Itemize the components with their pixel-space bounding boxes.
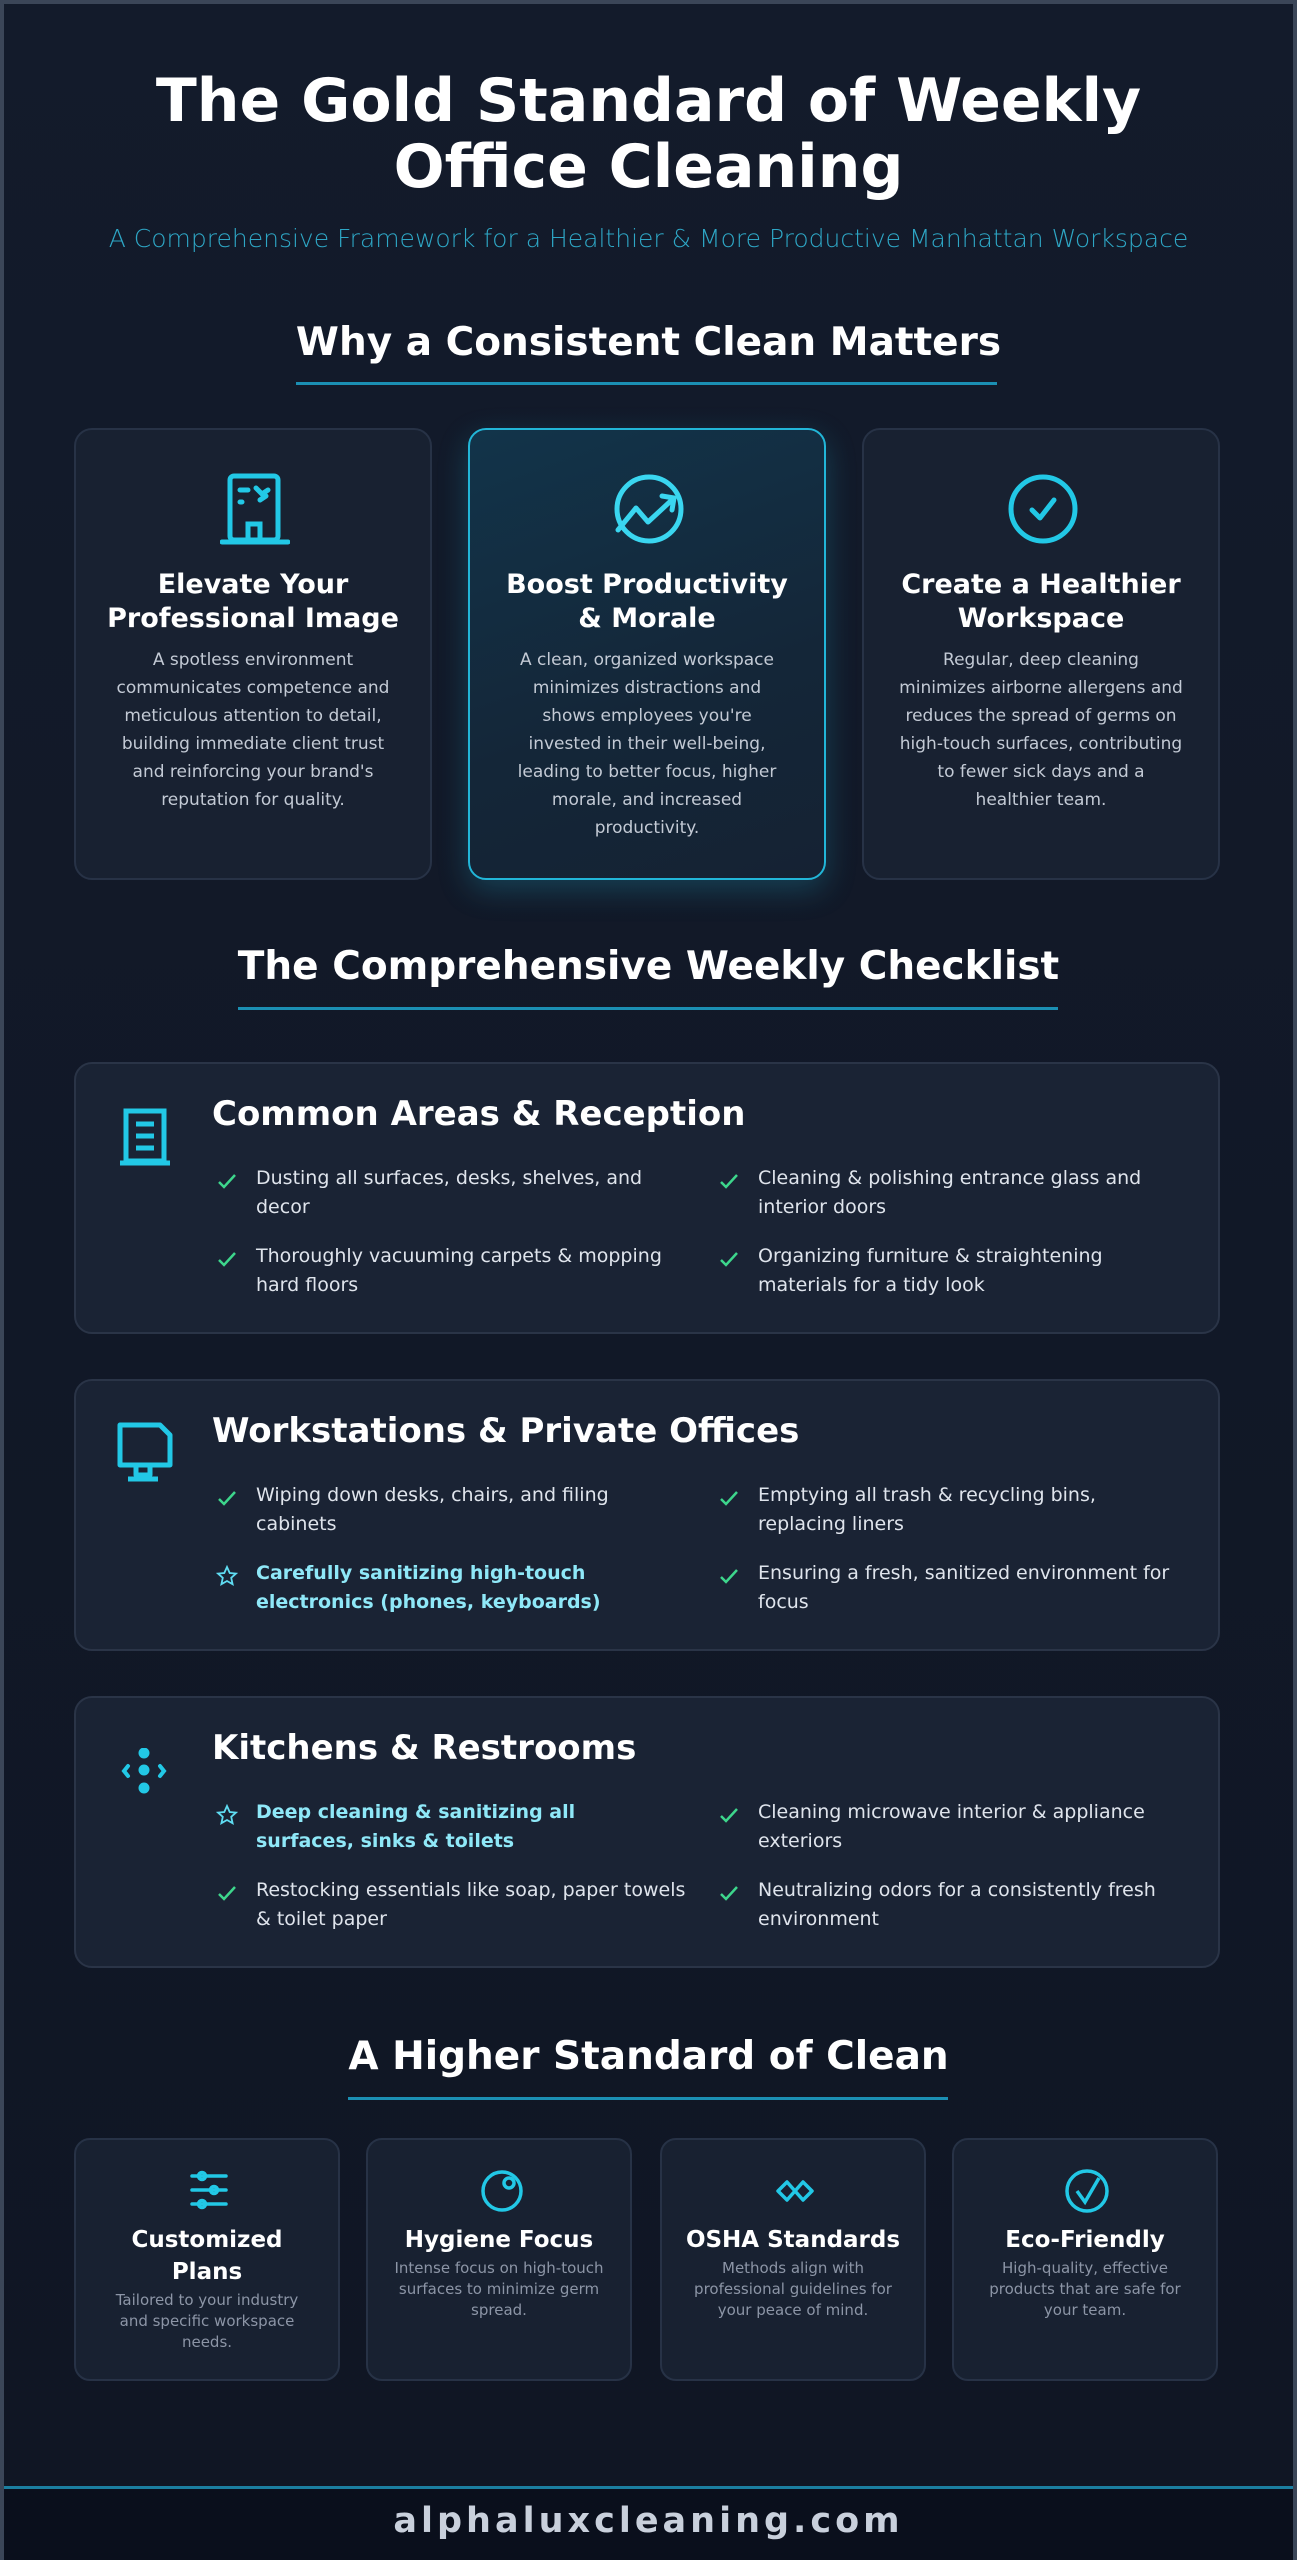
panel: kitchens: Restocking essentials like soap, paper towels & toilet paper (256, 1879, 685, 1930)
icon: infinity (776, 2180, 814, 2202)
card: healthier (862, 428, 1220, 880)
heading: checklist: The Comprehensive Weekly Checklist (238, 944, 1059, 989)
feature: customized plans (74, 2138, 340, 2381)
card: professional image (74, 428, 432, 880)
panel: workstations: Carefully sanitizing high-touch electronics (phones, keyboards) (256, 1562, 601, 1613)
icon: monitor (118, 1422, 172, 1482)
feature: customized plans: Customized (131, 2227, 283, 2253)
panel: kitchens: Cleaning microwave interior & appliance exteriors (758, 1801, 1145, 1852)
card: productivity: & Morale (578, 603, 716, 634)
icon: check circle (1065, 2169, 1109, 2213)
icon: building (220, 474, 290, 544)
feature: eco: Eco-Friendly (1005, 2227, 1165, 2253)
feature: hygiene: Intense focus on high-touch surfaces to minimize germ spread. (394, 2259, 604, 2319)
title: Office Cleaning (394, 132, 903, 202)
panel: common areas: Cleaning & polishing entrance glass and interior doors (758, 1167, 1141, 1218)
feature: hygiene: Hygiene Focus (405, 2227, 593, 2253)
panel: common areas (74, 1062, 1220, 1334)
subtitle: A Comprehensive Framework for a Healthier & More Productive Manhattan Workspace (109, 224, 1188, 253)
card: professional image: A spotless environment communicates competence and meticulous attention to detail, building immediate client trust and reinforcing your brand's reputation for quality. (117, 650, 389, 810)
card: productivity: A clean, organized workspace minimizes distractions and shows employees you're invested in their well-being, leading to better focus, higher morale, and increased productivity. (518, 650, 776, 838)
feature: customized plans: Plans (172, 2259, 242, 2285)
panel: workstations (74, 1379, 1220, 1651)
icon: check circle (1008, 474, 1078, 544)
icon: hygiene circle (481, 2170, 523, 2212)
heading: why: Why a Consistent Clean Matters (296, 320, 1001, 365)
card: healthier: Create a Healthier (901, 569, 1181, 600)
card: productivity (468, 428, 826, 880)
feature: osha (660, 2138, 926, 2381)
panel: kitchens: Neutralizing odors for a consistently fresh environment (758, 1879, 1156, 1930)
panel: common areas: Organizing furniture & straightening materials for a tidy look (758, 1245, 1103, 1296)
card: professional image: Professional Image (107, 603, 399, 634)
panel: common areas: Common Areas & Reception (212, 1094, 745, 1134)
icon: document (120, 1108, 170, 1166)
feature: osha: OSHA Standards (686, 2227, 900, 2253)
heading: higher standard: A Higher Standard of Clean (348, 2034, 949, 2079)
feature: eco: High-quality, effective products that are safe for your team. (989, 2259, 1181, 2319)
panel: workstations: Ensuring a fresh, sanitized environment for focus (758, 1562, 1169, 1613)
panel: kitchens: Deep cleaning & sanitizing all surfaces, sinks & toilets (256, 1801, 575, 1852)
card: productivity: Boost Productivity (506, 569, 788, 600)
panel: common areas: Dusting all surfaces, desks, shelves, and decor (256, 1167, 642, 1218)
panel: workstations: Wiping down desks, chairs, and filing cabinets (256, 1484, 609, 1535)
icon: sliders (190, 2170, 228, 2210)
card: healthier: Workspace (958, 603, 1124, 634)
feature: eco (952, 2138, 1218, 2381)
panel: workstations: Workstations & Private Offices (212, 1411, 799, 1451)
panel: kitchens: Kitchens & Restrooms (212, 1728, 636, 1768)
footer (4, 2486, 1293, 2560)
card: healthier: Regular, deep cleaning minimizes airborne allergens and reduces the spread of germs on high-touch surfaces, contributing to fewer sick days and a healthier team. (899, 650, 1183, 810)
feature: osha: Methods align with professional guidelines for your peace of mind. (694, 2259, 892, 2319)
feature: customized plans: Tailored to your industry and specific workspace needs. (116, 2291, 298, 2351)
panel: workstations: Emptying all trash & recycling bins, replacing liners (758, 1484, 1096, 1535)
panel: kitchens (74, 1696, 1220, 1968)
title: The Gold Standard of Weekly (156, 66, 1141, 136)
icon: spray (122, 1748, 166, 1794)
icon: chart circle (614, 474, 684, 544)
footer: alphaluxcleaning.com (393, 2501, 904, 2541)
title (156, 66, 1141, 202)
feature: hygiene (366, 2138, 632, 2381)
panel: common areas: Thoroughly vacuuming carpets & mopping hard floors (256, 1245, 662, 1296)
card: professional image: Elevate Your (158, 569, 348, 600)
